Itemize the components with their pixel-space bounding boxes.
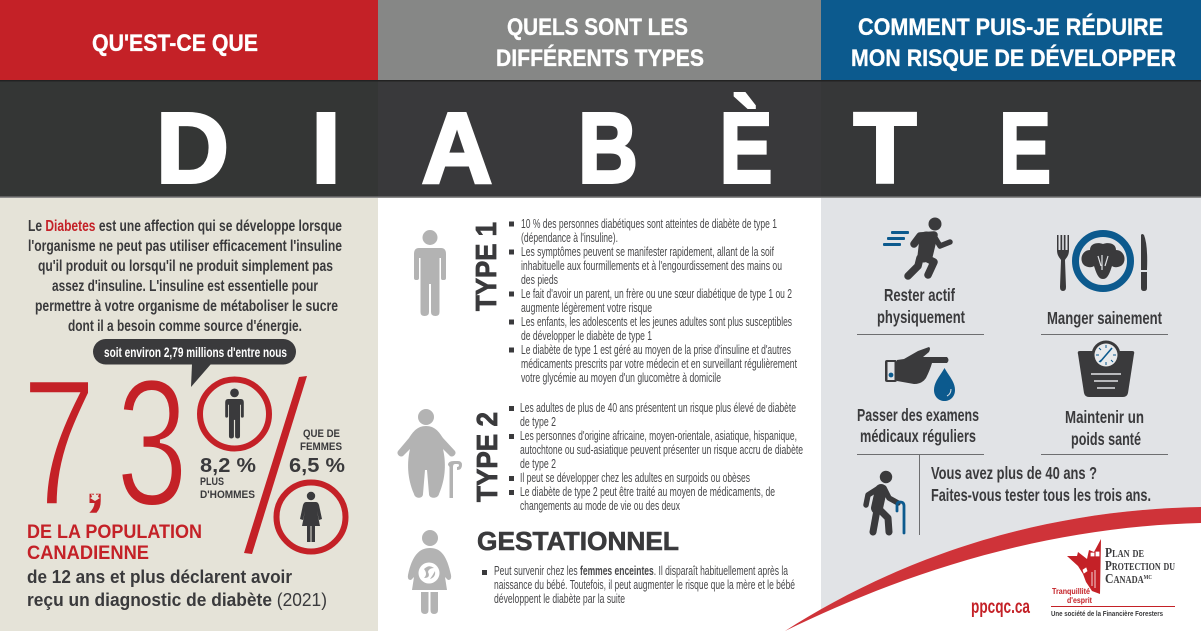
type 1 bullets: (dépendance à l'insuline).	[521, 231, 618, 245]
men statistic	[200, 455, 256, 501]
population caption: de 12 ans et plus déclarent avoir	[27, 566, 292, 587]
divider rules	[857, 334, 1168, 535]
icon: runner	[883, 218, 950, 276]
label: rester actif physiquement: Rester actif	[884, 285, 955, 305]
women statistic: 6,5 %	[289, 455, 345, 477]
definition text: Le Diabetes est une affection qui se développe lorsque	[28, 218, 342, 235]
callout: plus de 40 ans	[931, 463, 1151, 505]
title band: diabète: E	[999, 92, 1051, 204]
type 1 bullets: Les symptômes peuvent se manifester rapidement, allant de la soif	[521, 245, 774, 259]
icon: finger with blood drop	[885, 347, 955, 401]
header: quels sont les différents types: DIFFÉRENTS TYPES	[496, 44, 704, 72]
type 2 bullets: Les personnes d'origine africaine, moyen-orientale, asiatique, hispanique,	[520, 429, 797, 443]
label: examens médicaux: médicaux réguliers	[860, 426, 976, 446]
label: poids santé: poids santé	[1071, 429, 1141, 449]
logo tagline: Une société de la Financière Foresters	[1051, 611, 1163, 618]
logo wordmark: Canada	[1105, 572, 1151, 587]
label: manger sainement: Manger sainement	[1047, 308, 1162, 328]
title band: diabète: B	[578, 92, 638, 204]
population caption: CANADIENNE	[27, 542, 149, 564]
definition text: permettre à votre organisme de métaboliser le sucre	[35, 298, 338, 315]
type 1 bullets: Les enfants, les adolescents et les jeunes adultes sont plus susceptibles	[521, 315, 792, 329]
icon: maple leaf	[1067, 539, 1101, 594]
definition text: l'organisme ne peut pas utiliser efficacement l'insuline	[28, 238, 342, 255]
population caption: reçu un diagnostic de diabète (2021)	[27, 589, 327, 610]
type 1 bullets: augmente légèrement votre risque	[521, 301, 652, 315]
gestational bullet text: naissance du bébé. Toutefois, il peut augmenter le risque que la mère et le bébé	[494, 578, 795, 592]
footer swoosh	[785, 507, 1201, 631]
label: rester actif physiquement	[877, 285, 965, 327]
type 1 bullets: votre glycémie au moyen d'un glucomètre à domicile	[521, 371, 721, 385]
header: quels sont les différents types	[378, 0, 821, 80]
icon: pregnant woman	[408, 530, 451, 614]
icon: plate with broccoli, fork and knife	[1057, 234, 1147, 291]
men statistic: PLUS	[200, 476, 224, 488]
women circle with icon	[276, 482, 346, 552]
type 2 bullets: Il peut se développer chez les adultes en surpoids ou obèses	[520, 471, 750, 485]
big number 7,3: 7	[22, 342, 96, 544]
type 2 bullets: Le diabète de type 2 peut être traité au moyen de médicaments, de	[520, 485, 775, 499]
gestational bullet text: Peut survenir chez les femmes enceintes. Il disparaît habituellement après la	[494, 564, 788, 578]
big number 7,3: ,	[84, 448, 106, 517]
type 2 bullets: autochtone ou sud-asiatique peuvent présenter un risque accru de diabète	[520, 443, 803, 457]
title band: diabète	[0, 80, 1201, 204]
panel: types de diabète	[397, 217, 803, 614]
logo tagline	[1051, 587, 1175, 618]
label: examens médicaux: Passer des examens	[857, 405, 979, 425]
callout: 2,79 millions	[93, 339, 296, 387]
type 1 bullets: 10 % des personnes diabétiques sont atteintes de diabète de type 1	[521, 217, 777, 231]
logo wordmark: MC	[1144, 575, 1152, 581]
title band: diabète: È	[720, 92, 772, 204]
title band: diabète: T	[854, 92, 916, 204]
percent sign slash	[244, 376, 307, 554]
heading: type 2: TYPE 2	[472, 412, 504, 502]
men statistic: D'HOMMES	[200, 489, 255, 501]
type 1 bullets: Le diabète de type 1 est géré au moyen de la prise d'insuline et d'autres	[521, 343, 791, 357]
label: rester actif physiquement: physiquement	[877, 307, 965, 327]
logo wordmark: Plan de	[1105, 546, 1144, 561]
header: comment réduire mon risque: COMMENT PUIS-JE RÉDUIRE	[858, 13, 1163, 41]
logo wordmark	[1105, 546, 1175, 587]
logo tagline: Tranquillité	[1052, 587, 1090, 596]
icon: overweight older person with cane	[397, 409, 462, 498]
definition text: dont il a besoin comme source d'énergie.	[68, 318, 302, 335]
title band: diabète: D	[156, 92, 229, 204]
title band: diabète: I	[311, 92, 341, 204]
icon: older person with cane	[866, 471, 904, 533]
icon: weight scale	[1078, 340, 1134, 397]
type 1 bullets	[509, 217, 797, 385]
population caption	[27, 521, 327, 610]
header: qu'est-ce que: QU'EST-CE QUE	[92, 30, 258, 57]
men statistic: 8,2 %	[200, 455, 256, 477]
big number 7,3: 3	[116, 342, 188, 544]
type 2 bullets: changements au mode de vie ou des deux	[520, 499, 681, 513]
background panels	[0, 197, 1201, 631]
header: qu'est-ce que	[0, 0, 378, 80]
type 1 bullets: de développer le diabète de type 1	[521, 329, 652, 343]
type 2 bullets: Les adultes de plus de 40 ans présentent un risque plus élevé de diabète	[520, 401, 796, 415]
big number 7,3	[22, 342, 188, 544]
panel: réduire le risque	[857, 218, 1168, 535]
type 1 bullets: des pieds	[521, 273, 558, 287]
title band: diabète: A	[422, 92, 492, 204]
type 1 bullets: inhabituelle aux fourmillements et à l'engourdissement des mains ou	[521, 259, 782, 273]
type 1 bullets: médicaments prescrits par votre médecin et en surveillant régulièrement	[521, 357, 797, 371]
type 2 bullets: de type 2	[520, 457, 556, 471]
heading: type 1: TYPE 1	[471, 222, 503, 311]
women statistic: FEMMES	[300, 441, 342, 453]
header: quels sont les différents types: QUELS SONT LES	[507, 14, 688, 41]
heading: gestationnel: GESTATIONNEL	[477, 528, 679, 556]
women statistic: QUE DE	[303, 428, 340, 440]
population caption: DE LA POPULATION	[27, 521, 202, 543]
panel: qu'est-ce que le diabète	[22, 218, 346, 610]
gestational bullet text: développent le diabète par la suite	[494, 592, 625, 606]
definition text: qu'il produit ou lorsqu'il ne produit simplement pas	[38, 258, 333, 275]
icon: person type 1	[414, 230, 446, 316]
website link: ppcqc.ca	[971, 597, 1030, 618]
callout: 2,79 millions: soit environ 2,79 millions d'entre nous	[104, 344, 287, 360]
type 2 bullets: de type 2	[520, 415, 556, 429]
logo wordmark: Protection du	[1105, 559, 1175, 574]
type 2 bullets	[509, 401, 803, 513]
logo: plan de protection du canada	[1051, 539, 1175, 618]
women statistic	[289, 428, 345, 477]
logo tagline: d'esprit	[1067, 596, 1092, 605]
callout: plus de 40 ans: Vous avez plus de 40 ans ?	[931, 463, 1097, 483]
gestational bullet text	[482, 564, 795, 606]
label: poids santé	[1065, 407, 1144, 449]
men circle with icon	[200, 380, 269, 448]
label: poids santé: Maintenir un	[1065, 407, 1144, 427]
definition text	[28, 218, 342, 335]
type 1 bullets: Le fait d'avoir un parent, un frère ou une sœur diabétique de type 1 ou 2	[521, 287, 792, 301]
header: comment réduire mon risque	[821, 0, 1201, 80]
definition text: assez d'insuline. L'insuline est essentielle pour	[52, 278, 318, 295]
label: examens médicaux	[857, 405, 979, 446]
